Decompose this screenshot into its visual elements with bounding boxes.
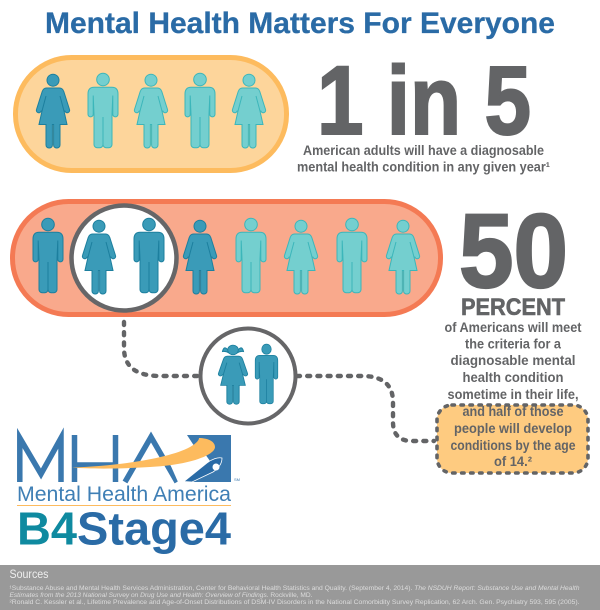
text: 1 in 5 description: mental health condition in any given year¹ xyxy=(297,158,550,174)
text: 1 in 5 description xyxy=(297,142,550,174)
statistic: 50: 50 xyxy=(459,193,568,310)
text: percent description: sometime in their life, xyxy=(448,387,578,402)
icon: woman xyxy=(386,220,420,294)
logo service mark: SM xyxy=(234,477,240,482)
icon: boy xyxy=(255,344,278,404)
citation 1: ¹Substance Abuse and Mental Health Services Administration, Center for Behavioral Health Statistics and Quality. (September 4, 2014). The NSDUH Report: Substance Use and Mental Health xyxy=(10,585,580,592)
text: percent description xyxy=(444,320,582,469)
logo white wedge xyxy=(170,454,210,482)
icon: woman in circle xyxy=(82,220,116,294)
text: percent description: of 14.² xyxy=(494,454,532,469)
callout: dotted highlight box xyxy=(437,405,588,473)
panel: child icons in circle xyxy=(200,328,296,424)
icon: woman xyxy=(134,74,168,148)
logo letters xyxy=(20,435,177,482)
campaign name: B4Stage4: B4Stage4 xyxy=(17,502,231,554)
heading: sources: Sources xyxy=(10,569,49,581)
icon: woman xyxy=(284,220,318,294)
panel: sources footer xyxy=(0,565,600,610)
text: percent description: and half of those xyxy=(462,404,564,419)
panel: 1 in 5 people pictogram xyxy=(16,58,286,170)
logo pen xyxy=(184,458,222,482)
citation 2: ²Ronald C. Kessler et al., Lifetime Prevalence and Age-of-Onset Distributions of DSM-IV Disorders in the National Comorbidity Survey Replication, 62 Arch. Gen. Psychiatry 593, 595 (2005). xyxy=(10,599,580,606)
text: percent description: health condition xyxy=(462,370,564,385)
icon: man xyxy=(337,218,367,293)
dotted connector: big circle to small circle xyxy=(124,322,199,376)
logo: MHA xyxy=(17,435,240,554)
icon: man xyxy=(185,73,215,148)
icon: woman xyxy=(183,220,217,294)
title: Mental Health Matters For Everyone xyxy=(45,7,555,40)
icon: highlighted woman xyxy=(36,74,70,148)
text: 1 in 5 description: American adults will have a diagnosable xyxy=(303,142,544,158)
logo square with pen xyxy=(184,435,231,482)
text: percent description: diagnosable mental xyxy=(450,353,576,368)
logo swoosh xyxy=(72,438,215,469)
icon: man in circle xyxy=(134,218,164,293)
icon: girl xyxy=(218,345,248,404)
icon: woman xyxy=(232,74,266,148)
icon: man xyxy=(88,73,118,148)
text: percent description: of Americans will meet xyxy=(444,320,582,335)
logo pen dot xyxy=(212,464,220,470)
circle highlight xyxy=(72,206,176,310)
text: percent description: people will develop xyxy=(454,421,572,436)
heading: percent: PERCENT xyxy=(461,294,565,321)
icon: man xyxy=(33,218,63,293)
statistic: 1 in 5: 1 in 5 xyxy=(317,46,531,155)
dotted connector: small circle to callout xyxy=(297,376,434,441)
text: percent description: conditions by the age xyxy=(450,438,576,453)
logo name: Mental Health America xyxy=(17,483,231,506)
panel: 50 percent people pictogram xyxy=(12,202,440,314)
logo rule xyxy=(17,505,231,506)
citation 1 continued: Estimates from the 2013 National Survey on Drug Use and Health: Overview of Findings. Rockville, MD. xyxy=(10,592,313,599)
icon: man xyxy=(236,218,266,293)
text: percent description: the criteria for a xyxy=(465,336,561,352)
